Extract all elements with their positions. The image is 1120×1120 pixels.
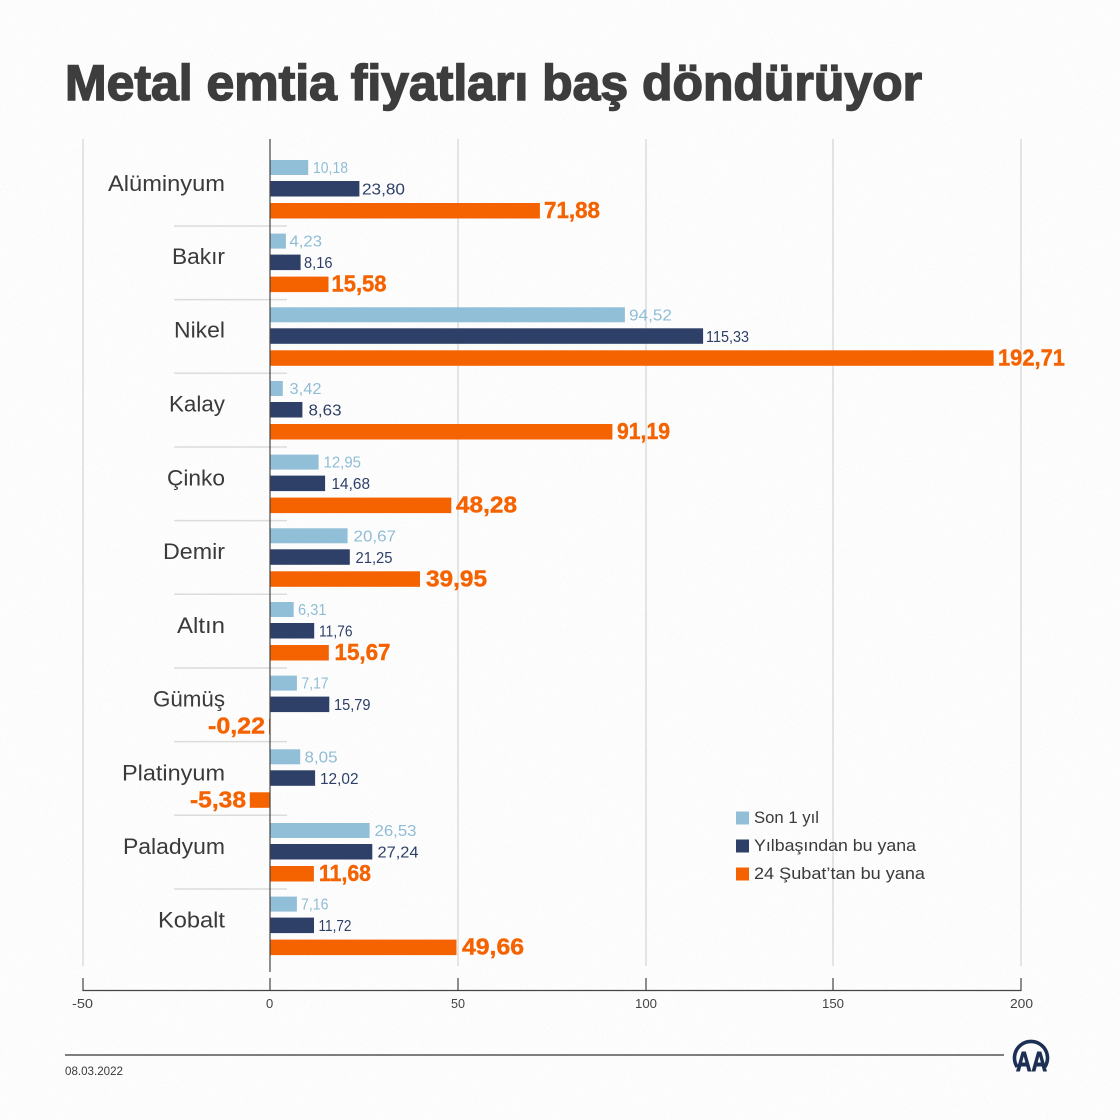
- x axis: -50: [72, 996, 93, 1011]
- row: Altın: 15,67: [334, 639, 390, 665]
- x axis: 100: [635, 996, 657, 1011]
- row: Nikel: [174, 307, 1065, 370]
- x axis: [72, 978, 1033, 1011]
- row: Bakır: Bakır: [172, 244, 225, 269]
- x axis: 0: [266, 996, 273, 1011]
- row: Platinyum: [122, 749, 359, 812]
- legend: Son 1 yıl: [754, 809, 819, 827]
- row: Gümüş: [153, 676, 371, 739]
- row: Alüminyum: 10,18: [313, 160, 348, 177]
- row: Nikel: 192,71: [998, 344, 1065, 370]
- row: Çinko: Çinko: [167, 465, 225, 490]
- row: Kalay: [169, 381, 670, 444]
- row: Gümüş: Gümüş: [153, 687, 225, 712]
- legend: Yılbaşından bu yana: [754, 837, 917, 855]
- row: Alüminyum: Alüminyum: [108, 171, 225, 196]
- footer rule: [65, 1054, 1004, 1056]
- row: Kobalt: 49,66: [462, 934, 524, 960]
- row: Kobalt: Kobalt: [158, 908, 225, 933]
- row: Paladyum: Paladyum: [123, 834, 225, 859]
- row: Demir: Demir: [163, 539, 225, 564]
- row: Bakır: 4,23: [290, 234, 322, 251]
- row: Alüminyum: 23,80: [362, 182, 405, 198]
- x axis: 150: [822, 996, 844, 1011]
- row: Nikel: 94,52: [629, 307, 672, 324]
- date: 08.03.2022: [65, 1066, 123, 1078]
- row: Çinko: 48,28: [456, 492, 517, 518]
- row: Altın: 11,76: [319, 624, 353, 640]
- row: Çinko: 12,95: [324, 455, 361, 472]
- row: Paladyum: 11,68: [319, 860, 371, 886]
- row: Nikel: Nikel: [174, 318, 225, 343]
- row: Kobalt: [158, 897, 524, 960]
- title: Metal emtia fiyatları baş döndürüyor: [65, 55, 922, 111]
- row: Demir: [163, 528, 487, 591]
- legend: 24 Şubat’tan bu yana: [754, 865, 926, 883]
- row: Bakır: [172, 234, 387, 297]
- row: Gümüş: 7,17: [302, 676, 329, 693]
- row: Gümüş: -0,22: [208, 713, 265, 739]
- row: Demir: 21,25: [356, 550, 393, 567]
- row: Çinko: [167, 455, 517, 518]
- row: Platinyum: 12,02: [320, 771, 359, 788]
- row: Nikel: 115,33: [706, 329, 749, 346]
- row: Platinyum: Platinyum: [122, 760, 225, 785]
- chart: metal price changes: [83, 139, 1065, 972]
- row: Bakır: 15,58: [332, 271, 387, 297]
- row: Altın: 6,31: [298, 602, 327, 619]
- row: Altın: [177, 602, 390, 665]
- row: Gümüş: 15,79: [334, 697, 371, 714]
- row: Paladyum: 27,24: [378, 844, 419, 862]
- row: Platinyum: 8,05: [304, 749, 338, 766]
- row: Paladyum: 26,53: [374, 823, 417, 840]
- row: Platinyum: -5,38: [190, 786, 246, 812]
- icon: AA logo: [1015, 1041, 1048, 1077]
- row: Çinko: 14,68: [332, 476, 370, 493]
- row: Kalay: Kalay: [169, 392, 225, 416]
- x axis: 50: [451, 996, 465, 1011]
- row: Kobalt: 7,16: [301, 897, 329, 914]
- row: Altın: Altın: [177, 613, 225, 638]
- row: Alüminyum: 71,88: [544, 197, 600, 223]
- row: Demir: 39,95: [426, 565, 487, 591]
- icon: AA logo: AA: [1016, 1046, 1047, 1077]
- row: Bakır: 8,16: [304, 255, 333, 272]
- row: Paladyum: [123, 823, 419, 886]
- row: Kobalt: 11,72: [318, 918, 352, 935]
- zero axis line: [269, 139, 271, 972]
- x axis: 200: [1010, 996, 1033, 1011]
- row: Kalay: 8,63: [308, 402, 342, 420]
- row: Alüminyum: [108, 160, 600, 223]
- legend: [736, 809, 926, 883]
- row: Demir: 20,67: [354, 528, 396, 545]
- row: Kalay: 3,42: [290, 381, 322, 398]
- row: Kalay: 91,19: [617, 418, 670, 444]
